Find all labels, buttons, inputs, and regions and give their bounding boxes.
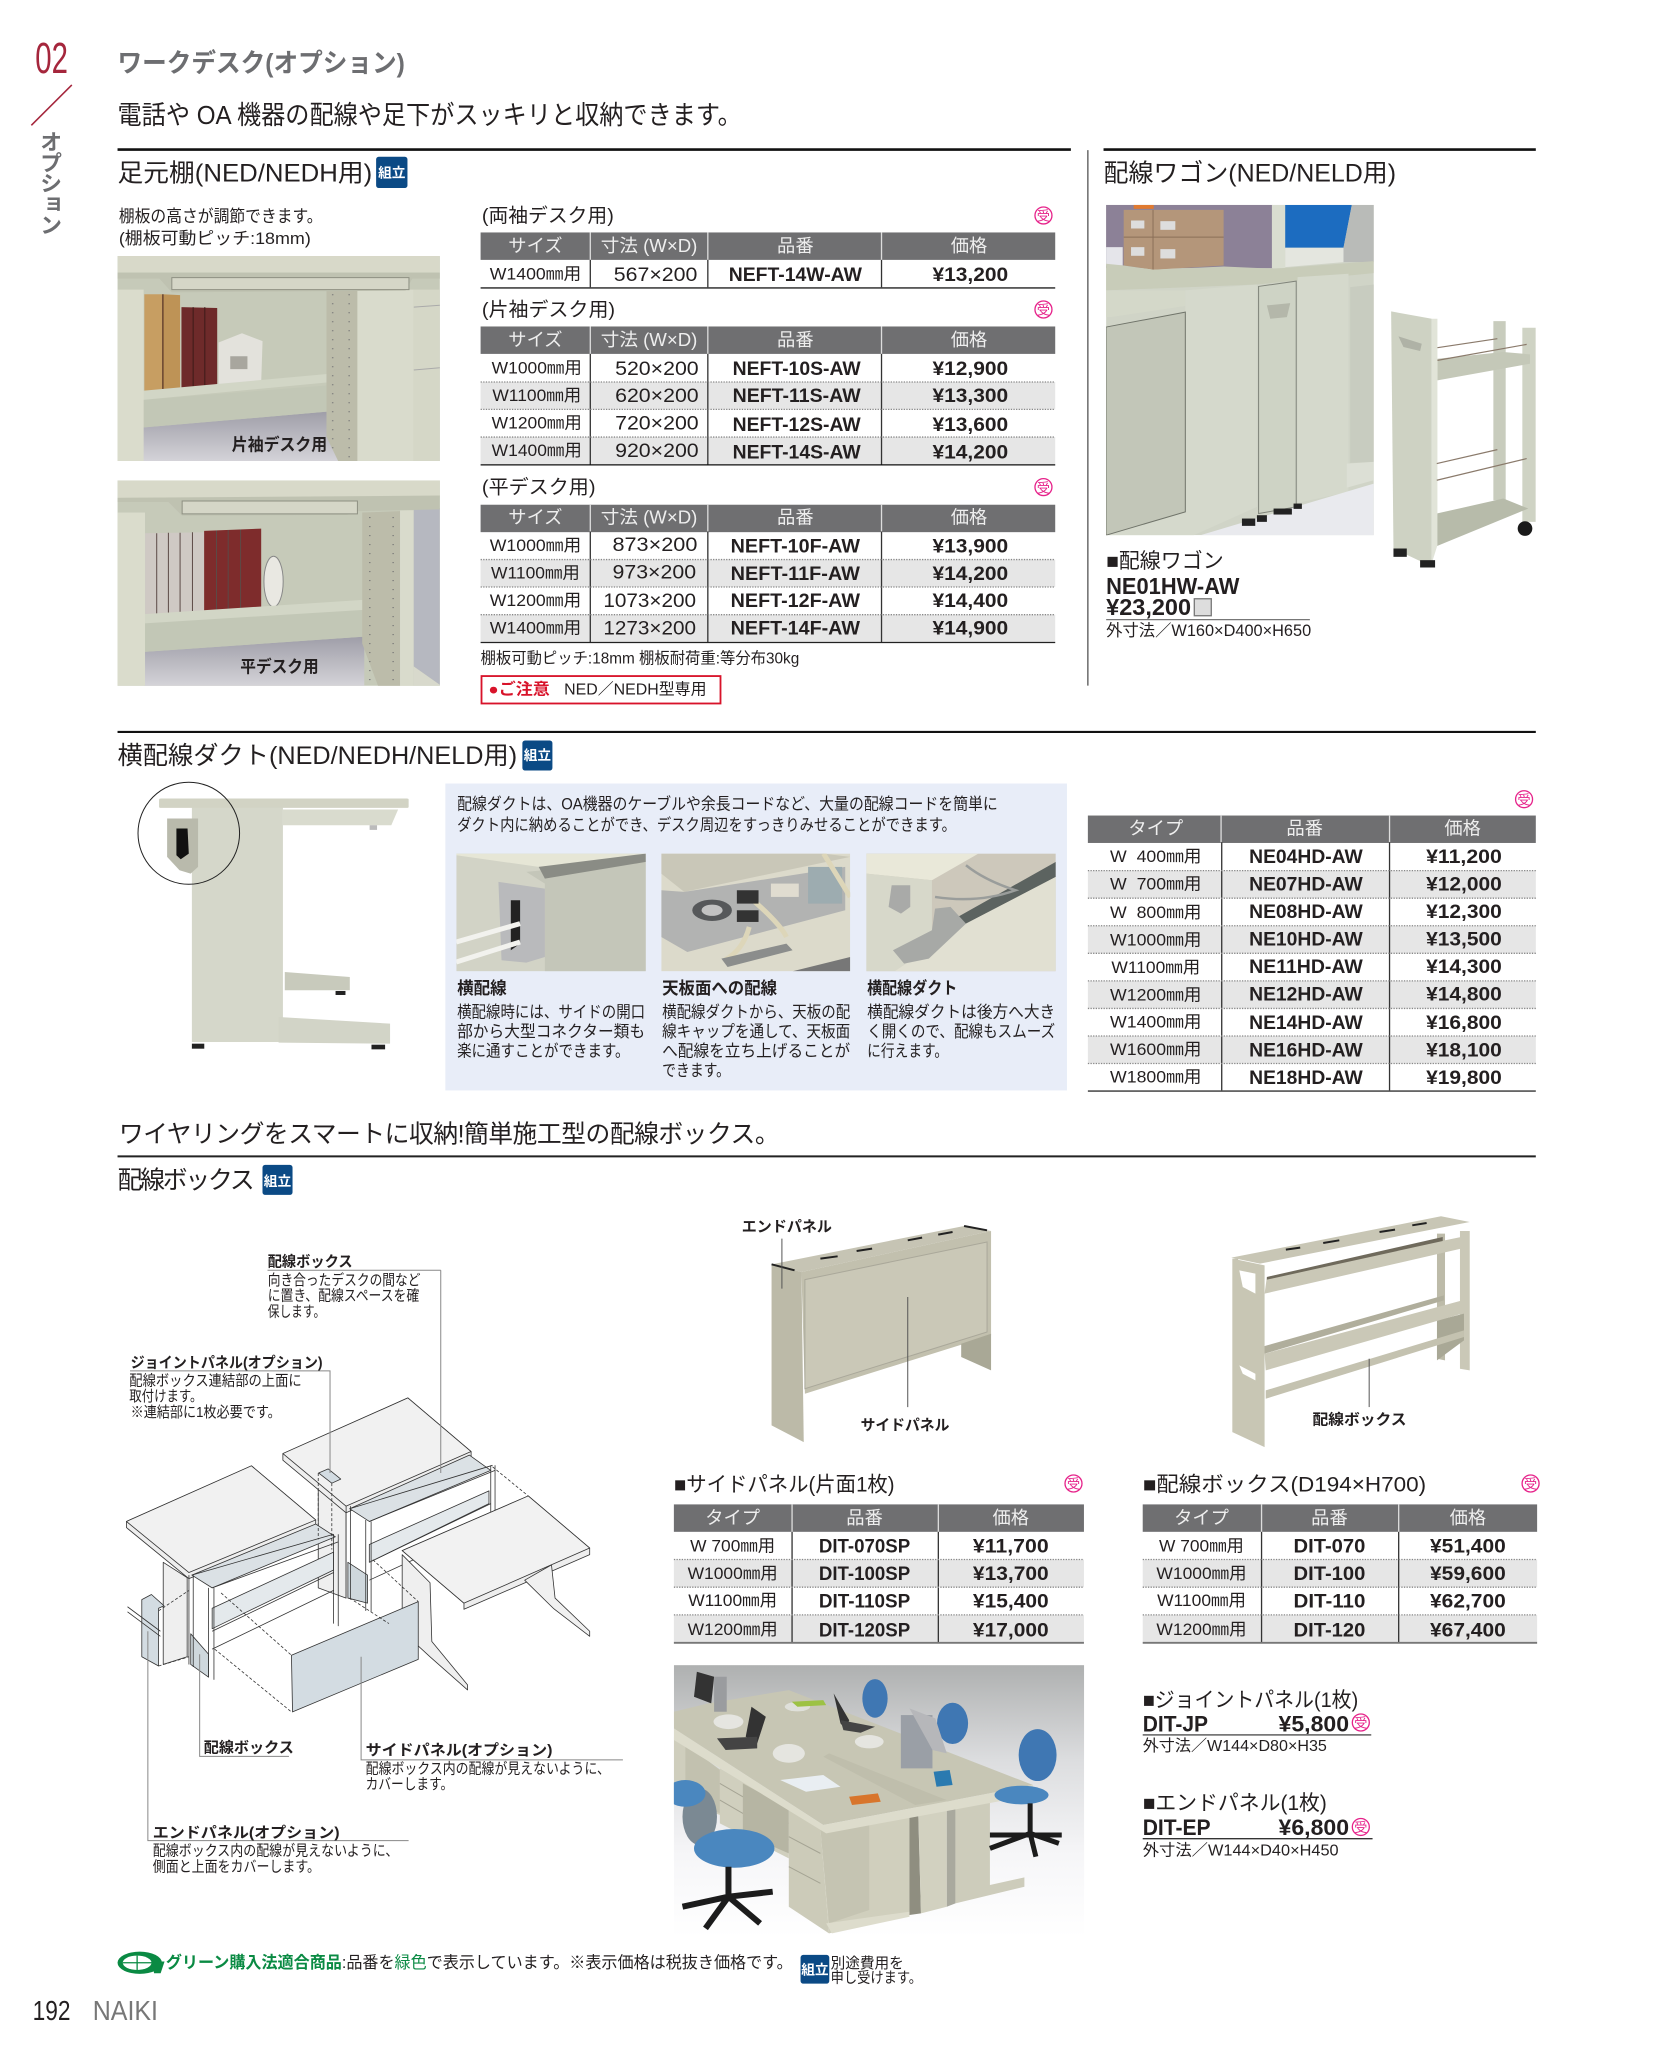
heading: wiring wagon: 配線ワゴン(NED/NELD用) [1104,160,1396,188]
table: single pedestal desks [481,299,1055,465]
table: double pedestal desks: 寸法 (W×D) [601,235,697,256]
table: side panel prices: 受 [1067,1477,1080,1492]
product: wagon name and price: NE01HW-AW [1106,573,1240,599]
column: duct: 横配線ダクトは後方へ大き [867,1003,1055,1021]
table: double pedestal desks: (両袖デスク用) [482,205,614,227]
callout: joint panel: 取付けます。 [129,1388,202,1405]
table: wiring box prices: ■配線ボックス(D194×H700) [1143,1473,1426,1496]
callout: end panel: 配線ボックス内の配線が見えないように、 [153,1843,398,1860]
table: side panel prices: ■サイドパネル(片面1枚) [674,1473,895,1496]
table: flat desks: ¥13,900 [932,535,1008,557]
table: single pedestal desks: W1400㎜用 [492,441,582,460]
callout: side panel: 配線ボックス内の配線が見えないように、 [366,1760,610,1777]
product: joint panel: 外寸法／W144×D80×H35 [1143,1737,1327,1755]
callout: end panel [153,1824,398,1875]
table: duct prices: ¥14,300 [1426,956,1502,978]
badge: assembly [801,1955,829,1984]
badge: assembly [262,1165,293,1195]
table: duct prices: NE10HD-AW [1249,928,1363,950]
table: side panel prices: ¥15,400 [973,1591,1049,1613]
table: flat desks: (平デスク用) [482,477,596,499]
table: single pedestal desks: NEFT-11S-AW [733,385,861,407]
table: side panel prices: DIT-070SP [819,1536,910,1558]
table: side panel prices: タイプ [705,1507,760,1528]
chapter number and side tab: 02 [35,35,68,83]
callout: caution [482,676,720,703]
column: horizontal wiring [457,979,645,1060]
product: joint panel [1143,1689,1371,1755]
table: flat desks: W1400㎜用 [490,618,581,637]
table: double pedestal desks: 受 [1037,209,1050,224]
callout: wiring box lower: 配線ボックス [204,1739,294,1757]
table: single pedestal desks: 520×200 [615,359,699,380]
product: end panel: 受 [1354,1820,1367,1835]
table: duct prices: NE16HD-AW [1249,1039,1363,1061]
label: wiring box: 配線ボックス [1312,1411,1407,1429]
table: side panel prices: W1200㎜用 [688,1620,778,1639]
table: wiring box prices: DIT-110 [1294,1591,1365,1613]
table: side panel prices: W 700㎜用 [690,1536,775,1555]
table: duct prices: ¥14,800 [1426,983,1502,1005]
table: single pedestal desks: 720×200 [615,414,699,435]
photo: side panel product [772,1226,991,1442]
photo: duct with cables [456,854,646,971]
footer note [118,1952,922,1986]
table: single pedestal desks: ¥13,300 [932,385,1008,407]
table: double pedestal desks: NEFT-14W-AW [729,264,862,286]
table: duct prices: ¥13,500 [1426,928,1502,950]
column: horizontal wiring: 部から大型コネクター類も [457,1023,645,1041]
diagram: exploded desk layout [126,1270,623,1841]
table: side panel prices: DIT-120SP [819,1619,910,1641]
product: end panel: ■エンドパネル(1枚) [1143,1792,1327,1815]
table: duct prices: 価格 [1444,817,1481,838]
column: top wiring: へ配線を立ち上げることが [662,1042,850,1060]
badge: assembly [522,740,552,770]
table: single pedestal desks: W1000㎜用 [492,358,582,377]
table: flat desks: NEFT-10F-AW [731,535,860,557]
product: wagon name and price: ■配線ワゴン [1106,550,1224,573]
column: duct: 横配線ダクト [867,978,957,998]
photo: wiring box product [1231,1216,1470,1447]
table: duct prices: NE11HD-AW [1249,956,1363,978]
badge: assembly [376,157,407,188]
text: shelf description [119,207,323,248]
table: duct prices: NE04HD-AW [1249,846,1363,868]
table: side panel prices: DIT-100SP [819,1563,910,1585]
icon: green purchase logo [118,1952,165,1974]
table: flat desks: W1000㎜用 [490,536,581,555]
label: side panel: サイドパネル [861,1417,949,1434]
product: wagon name and price [1106,550,1311,640]
table: duct prices: 受 [1518,792,1531,807]
photo: office scene [665,1665,1084,1937]
callout: wiring box: に置き、配線スペースを確 [268,1288,419,1305]
callout: side panel: カバーします。 [366,1776,453,1793]
table: single pedestal desks: ¥12,900 [932,358,1008,380]
table: flat desks: 873×200 [612,535,697,556]
table: side panel prices [674,1473,1084,1643]
table: duct prices: W 400㎜用 [1110,847,1201,866]
callout: wiring box: 向き合ったデスクの間など [268,1271,421,1289]
table: duct prices: ¥19,800 [1426,1067,1502,1089]
table: flat desks: ¥14,900 [932,618,1008,640]
product: end panel: 外寸法／W144×D40×H450 [1143,1842,1339,1860]
table: duct prices: W1100㎜用 [1111,958,1200,977]
heading: foot shelf: 足元棚(NED/NEDH用) [118,160,372,188]
column: top wiring: 天板面への配線 [662,979,777,998]
table: duct prices: NE12HD-AW [1249,983,1363,1005]
text: assembly fee note: 申し受けます。 [831,1969,922,1986]
table: side panel prices: 品番 [846,1507,883,1528]
table: wiring box prices: DIT-100 [1294,1563,1365,1585]
label: end panel: エンドパネル [742,1218,832,1235]
note: shelf pitch and load: 棚板可動ピッチ:18mm 棚板耐荷重:等分布30kg [481,649,799,667]
table: single pedestal desks: ¥13,600 [932,414,1008,436]
table: duct prices: NE14HD-AW [1249,1012,1363,1034]
table: double pedestal desks [481,205,1055,288]
page number: 192 [33,1995,71,2026]
text: shelf description: 棚板の高さが調節できます。 [119,207,323,226]
chapter number and side tab: オプション [37,131,62,235]
callout: joint panel [129,1354,323,1421]
panel: wiring wagon [1104,160,1536,640]
callout: side panel [366,1742,610,1793]
table: wiring box prices: ¥59,600 [1430,1563,1506,1585]
table: single pedestal desks: 620×200 [615,386,699,407]
table: duct prices: ¥12,300 [1426,901,1502,923]
table: duct prices: ¥16,800 [1426,1012,1502,1034]
badge: assembly: 組立 [524,747,551,763]
product: joint panel: DIT-JP [1143,1712,1208,1737]
table: single pedestal desks: NEFT-12S-AW [733,414,861,436]
table: flat desks: 受 [1037,480,1050,495]
photo: opening duct [866,854,1056,971]
table: flat desks: W1200㎜用 [490,591,581,610]
table: wiring box prices: W 700㎜用 [1159,1536,1244,1555]
table: flat desks: 973×200 [612,563,696,584]
table: wiring box prices: 品番 [1311,1507,1348,1528]
callout: joint panel: ジョイントパネル(オプション) [131,1354,323,1371]
column: duct: く開くので、配線もスムーズ [867,1023,1055,1041]
callout: caution: NED／NEDH型専用 [564,681,707,699]
callout: wiring box: 保します。 [268,1303,325,1320]
table: duct prices: W 800㎜用 [1110,903,1201,922]
heading: duct: 横配線ダクト(NED/NEDH/NELD用) [118,742,517,770]
table: flat desks: 1273×200 [603,619,696,640]
table: single pedestal desks: NEFT-14S-AW [733,441,861,463]
table: flat desks: 品番 [777,507,814,528]
table: flat desks: サイズ [508,507,563,528]
table: double pedestal desks: W1400㎜用 [490,264,581,283]
table: duct prices: W1000㎜用 [1110,930,1201,949]
column: top wiring [662,979,850,1080]
table: duct prices: タイプ [1128,817,1183,838]
table: duct prices [1088,791,1536,1091]
table: duct prices: NE08HD-AW [1249,901,1363,923]
page title: ワークデスク(オプション) [118,48,405,78]
product: end panel [1143,1792,1373,1860]
photo: top wiring [661,854,850,971]
callout: caution: ●ご注意 [488,680,550,699]
table: wiring box prices: DIT-070 [1294,1536,1365,1558]
table: flat desks: 1073×200 [603,591,696,612]
callout: end panel: 側面と上面をカバーします。 [153,1858,320,1875]
column: horizontal wiring: 横配線時には、サイドの開口 [457,1003,645,1021]
badge: assembly: 組立 [378,165,406,181]
text: shelf description: (棚板可動ピッチ:18mm) [119,229,311,248]
table: double pedestal desks: 価格 [951,235,987,256]
photo label: 片袖デスク用 [232,435,327,455]
column: duct [867,978,1055,1060]
table: side panel prices: W1000㎜用 [688,1564,778,1583]
table: wiring box prices: ¥51,400 [1430,1536,1506,1558]
table: single pedestal desks: サイズ [508,329,563,350]
column: top wiring: 線キャップを通して、天板面 [662,1023,850,1041]
table: wiring box prices: DIT-120 [1294,1619,1365,1641]
callout: wiring box [268,1253,421,1320]
text: green purchase legend: グリーン購入法適合商品:品番を緑色で表示しています。※表示価格は税抜き価格です。 [166,1953,793,1972]
product: joint panel: ¥5,800 [1279,1712,1349,1737]
text: duct intro: 配線ダクトは、OA機器のケーブルや余長コードなど、大量の配線コードを簡単に [457,795,998,814]
table: side panel prices: 価格 [993,1507,1029,1528]
table: double pedestal desks: 品番 [777,235,814,256]
table: flat desks: NEFT-11F-AW [731,563,860,585]
column: duct: に行えます。 [867,1042,948,1060]
panel: horizontal wiring duct [118,740,1536,1091]
table: flat desks: W1100㎜用 [491,564,580,583]
lead text: 電話や OA 機器の配線や足下がスッキリと収納できます。 [118,100,742,130]
table: single pedestal desks: (片袖デスク用) [482,299,615,321]
table: duct prices: W 700㎜用 [1110,874,1201,893]
table: single pedestal desks: 920×200 [615,441,699,462]
table: flat desks: ¥14,400 [932,590,1008,612]
column: top wiring: できます。 [662,1062,730,1080]
callout: wiring box: 配線ボックス [268,1253,353,1271]
panel: wiring box [118,1165,1539,1937]
table: wiring box prices: ¥67,400 [1430,1619,1506,1641]
column: horizontal wiring: 横配線 [457,979,507,998]
table: side panel prices: W1100㎜用 [688,1591,777,1610]
table: duct prices: ¥18,100 [1426,1039,1502,1061]
table: flat desks: 寸法 (W×D) [601,507,697,528]
table: single pedestal desks: W1200㎜用 [492,413,582,432]
chapter number and side tab [31,35,72,235]
panel: duct explanation [445,784,1067,1090]
table: wiring box prices [1143,1473,1539,1643]
badge: assembly: 組立 [801,1962,829,1978]
callout: joint panel: ※連結部に1枚必要です。 [131,1404,281,1421]
table: duct prices: 品番 [1286,817,1323,838]
table: duct prices: W1200㎜用 [1110,985,1201,1004]
callout: joint panel: 配線ボックス連結部の上面に [129,1373,302,1390]
table: side panel prices: DIT-110SP [819,1591,910,1613]
photo: flat desk shelf [118,480,440,686]
panel: foot shelf [118,157,1055,703]
headline: wiring box: ワイヤリングをスマートに収納!簡単施工型の配線ボックス。 [119,1121,780,1149]
table: single pedestal desks: 受 [1037,303,1050,318]
photo: single pedestal desk shelf [118,256,440,461]
table: side panel prices: ¥13,700 [973,1563,1049,1585]
brand name: NAIKI [93,1995,158,2026]
table: single pedestal desks: W1100㎜用 [492,386,581,405]
table: side panel prices: ¥17,000 [973,1619,1049,1641]
table: single pedestal desks: 寸法 (W×D) [601,329,697,350]
table: flat desks: NEFT-14F-AW [731,618,860,640]
table: single pedestal desks: 価格 [951,329,987,350]
table: wiring box prices: ¥62,700 [1430,1591,1506,1613]
table: single pedestal desks: ¥14,200 [932,441,1008,463]
table: flat desks: ¥14,200 [932,563,1008,585]
product: wagon name and price: 外寸法／W160×D400×H650 [1106,622,1311,640]
text: assembly fee note [831,1955,922,1986]
text: duct intro [457,795,998,835]
table: duct prices: W1600㎜用 [1110,1040,1201,1059]
table: double pedestal desks: ¥13,200 [932,264,1008,286]
text: assembly fee note: 別途費用を [831,1955,904,1972]
table: flat desks: NEFT-12F-AW [731,590,860,612]
product: end panel: DIT-EP [1143,1815,1211,1840]
table: single pedestal desks: 品番 [777,329,814,350]
product: joint panel: ■ジョイントパネル(1枚) [1143,1689,1358,1712]
table: duct prices: W1800㎜用 [1110,1068,1201,1087]
table: duct prices: NE18HD-AW [1249,1067,1363,1089]
table: wiring box prices: W1200㎜用 [1156,1620,1247,1639]
table: double pedestal desks: サイズ [508,235,563,256]
table: duct prices: ¥12,000 [1426,874,1502,896]
table: duct prices: W1400㎜用 [1110,1013,1201,1032]
table: flat desks: 価格 [951,507,987,528]
table: wiring box prices: タイプ [1174,1507,1229,1528]
product: joint panel: 受 [1354,1716,1367,1731]
table: flat desks [481,477,1055,643]
illustration: desk side view [138,782,409,1049]
table: wiring box prices: 価格 [1450,1507,1486,1528]
photo label: 平デスク用 [240,657,319,677]
text: duct intro: ダクト内に納めることができ、デスク周辺をすっきりみせることができます。 [457,816,956,835]
table: wiring box prices: W1100㎜用 [1157,1591,1246,1610]
table: wiring box prices: 受 [1524,1477,1537,1492]
badge: assembly: 組立 [264,1173,292,1189]
table: side panel prices: ¥11,700 [973,1536,1049,1558]
photo: wagon between desks [1106,205,1374,535]
heading: wiring box: 配線ボックス [118,1166,255,1194]
table: duct prices: NE07HD-AW [1249,874,1363,896]
product: end panel: ¥6,800 [1279,1815,1349,1840]
photo: wagon product [1391,311,1536,567]
callout: side panel: サイドパネル(オプション) [366,1742,552,1759]
table: wiring box prices: W1000㎜用 [1156,1564,1247,1583]
column: top wiring: 横配線ダクトから、天板の配 [662,1003,850,1021]
product: wagon name and price: ¥23,200 [1106,594,1191,620]
callout: end panel: エンドパネル(オプション) [153,1824,340,1841]
table: single pedestal desks: NEFT-10S-AW [733,358,861,380]
table: double pedestal desks: 567×200 [614,265,697,286]
column: horizontal wiring: 楽に通すことができます。 [457,1042,629,1060]
table: duct prices: ¥11,200 [1426,846,1502,868]
